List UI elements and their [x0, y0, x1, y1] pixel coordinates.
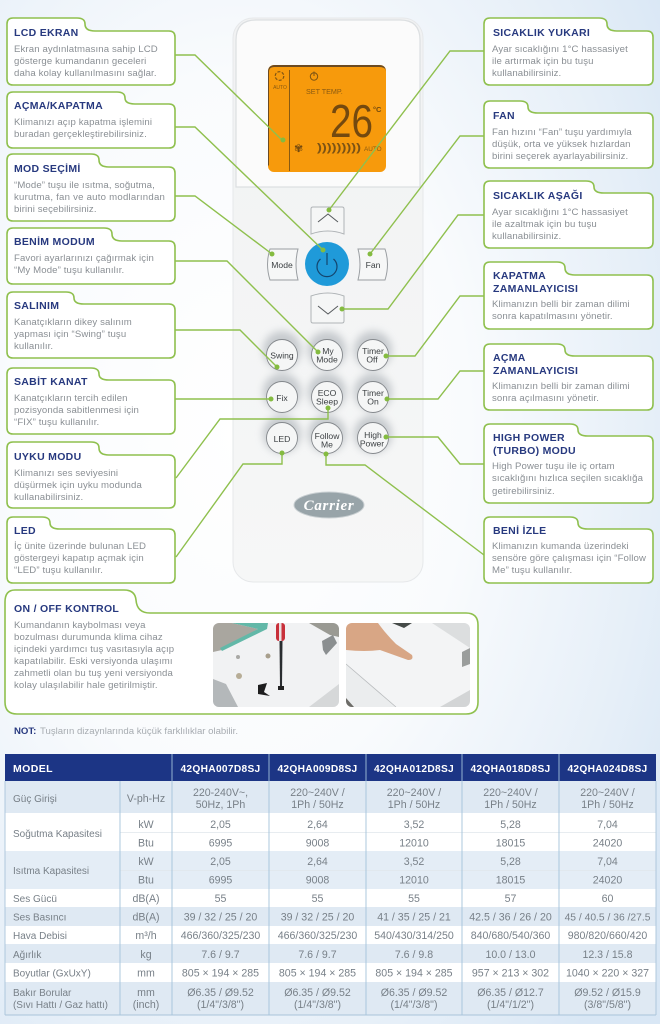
panel: Açma Zamanlayıcısı: Klimanızın belli bir zaman dilimi — [492, 381, 630, 392]
row: Ağırlık: 10.0 / 13.0 — [485, 949, 536, 961]
row: Ses Gücü: dB(A) — [132, 893, 160, 905]
panel: LCD Ekran: daha kolay kullanılmasını sağlar. — [14, 68, 157, 79]
row: Isıtma Kapasitesi: 12010 — [399, 874, 429, 886]
panel: Fan: düşük, orta ve yüksek hızlardan — [492, 139, 631, 150]
row: Bakır Borular — [13, 987, 641, 1011]
table header — [5, 754, 656, 781]
button: mode — [268, 249, 298, 280]
photo: screwdriver pressing the button — [213, 623, 339, 707]
row: Hava Debisi — [13, 930, 647, 942]
panel: High Power (Turbo) Modu: (TURBO) MODU — [493, 445, 576, 457]
row: Isıtma Kapasitesi: 18015 — [496, 874, 525, 886]
panel: High Power (Turbo) Modu: HIGH POWER — [493, 432, 565, 444]
row: Bakır Borular: (1/4"/3/8") — [294, 999, 341, 1011]
panel: Salınım: Kanatçıkların dikey salınım — [14, 317, 132, 328]
row: Güç Girişi: 1Ph / 50Hz — [291, 799, 344, 811]
panel: Sabit Kanat: “FIX” tuşu kullanılır. — [14, 417, 99, 428]
panel: Uyku Modu: Klimanızı ses seviyesini — [14, 468, 118, 479]
table header: MODEL — [13, 763, 53, 775]
row: Isıtma Kapasitesi: 9008 — [306, 874, 329, 886]
row: Soğutma Kapasitesi — [13, 819, 622, 850]
panel: Mod Seçimi: birini seçebilirsiniz. — [14, 204, 97, 215]
LCD display: ✾ — [294, 143, 303, 155]
row: Soğutma Kapasitesi: 18015 — [496, 838, 525, 850]
button: follow me: Follow — [315, 431, 340, 441]
button: eco sleep — [312, 382, 342, 412]
button shadows — [263, 331, 392, 453]
panel: High Power (Turbo) Modu: High Power tuşu ile iç ortam — [492, 461, 615, 472]
row: Isıtma Kapasitesi — [13, 856, 622, 886]
row: Ses Gücü: 57 — [505, 893, 516, 905]
row: Ses Basıncı: 41 / 35 / 25 / 21 — [377, 912, 451, 924]
row: Isıtma Kapasitesi: Btu — [138, 874, 154, 886]
panel: High Power (Turbo) Modu: sıcaklığını hızlıca seçilen sıcaklığa — [492, 473, 644, 484]
row: Ağırlık: 7.6 / 9.8 — [395, 949, 433, 961]
row: Ağırlık: 7.6 / 9.7 — [201, 949, 240, 961]
row: Bakır Borular: Ø6.35 / Ø9.52 — [284, 987, 351, 999]
panel: Fan: Fan hızını “Fan” tuşu yardımıyla — [492, 127, 632, 138]
button: my mode: Mode — [316, 354, 338, 364]
panel: High Power (Turbo) Modu — [484, 424, 653, 503]
panel: Mod Seçimi: MOD SEÇİMİ — [14, 162, 81, 175]
button: timer on: Timer — [362, 388, 384, 398]
panel: Beni İzle — [484, 517, 653, 583]
row: Güç Girişi: 220~240V / — [387, 787, 441, 799]
row: Soğutma Kapasitesi: Btu — [138, 838, 154, 850]
panel: Kapatma Zamanlayıcısı: sonra kapatılmasını yönetir. — [492, 311, 613, 322]
row: Bakır Borular: Bakır Borular — [13, 988, 72, 999]
table header: 42QHA009D8SJ — [277, 764, 358, 775]
panel: Benim Modum: BENİM MODUM — [14, 235, 95, 248]
panel: Beni İzle: Klimanızın kumanda üzerindeki — [492, 541, 629, 552]
panel: Salınım: SALINIM — [14, 300, 59, 312]
button: swing: Swing — [270, 350, 294, 360]
button: high power: Power — [360, 438, 384, 448]
panel: Fan: birini seçerek ayarlayabilirsiniz. — [492, 151, 628, 162]
row: Güç Girişi: Güç Girişi — [13, 794, 57, 805]
row: Boyutlar: 805 × 194 × 285 — [182, 968, 259, 980]
row: Ses Basıncı: 39 / 32 / 25 / 20 — [184, 912, 257, 924]
row: Soğutma Kapasitesi: kW — [138, 819, 154, 831]
button: led — [266, 422, 298, 454]
panel: Beni İzle: BENİ İZLE — [493, 524, 546, 537]
Carrier logo: Carrier — [304, 498, 354, 514]
button: fan: Fan — [366, 260, 381, 270]
panel: Sıcaklık Aşağı: Ayar sıcaklığını 1°C hassasiyet — [492, 207, 628, 218]
row: Ses Gücü: 55 — [408, 893, 420, 905]
panel: Uyku Modu — [7, 442, 175, 508]
panel: LED: “LED” tuşu kullanılır. — [14, 565, 103, 576]
row: Hava Debisi: 980/820/660/420 — [568, 930, 647, 942]
button: fix: Fix — [276, 393, 288, 403]
LCD display — [268, 65, 386, 172]
row: Ses Gücü: 55 — [215, 893, 226, 905]
button: down — [311, 293, 344, 323]
panel: On / Off Kontrol: Kumandanın kaybolması veya — [14, 620, 146, 631]
panel: Fan — [484, 101, 653, 168]
row: Bakır Borular: Ø9.52 / Ø15.9 — [574, 987, 641, 999]
panel: Sıcaklık Aşağı: kullanabilirsiniz. — [492, 231, 561, 242]
row: Güç Girişi: 220~240V / — [580, 787, 635, 799]
panel: LED: göstergeyi kapatıp açmak için — [14, 553, 144, 564]
leader lines — [175, 51, 484, 557]
button: up — [311, 207, 344, 234]
button: high power: High — [364, 430, 382, 440]
row: Ses Gücü: Ses Gücü — [13, 894, 57, 905]
LCD display: ))))))))) — [317, 142, 361, 154]
row: Ses Basıncı: 42.5 / 36 / 26 / 20 — [469, 912, 552, 924]
row: Güç Girişi: 1Ph / 50Hz — [581, 799, 634, 811]
row: Güç Girişi: 1Ph / 50Hz — [388, 799, 440, 811]
Carrier logo — [294, 492, 364, 518]
button: power — [305, 242, 349, 286]
row: Boyutlar: 1040 × 220 × 327 — [566, 968, 649, 980]
row: Ses Basıncı — [13, 912, 651, 924]
panel: On / Off Kontrol: kolay ulaşılabilir hale getirilmiştir. — [14, 680, 158, 691]
panel: Açma Zamanlayıcısı: AÇMA — [493, 352, 526, 364]
row: Ses Basıncı: 45 / 40.5 / 36 /27.5 — [565, 912, 651, 924]
row: Ağırlık — [13, 949, 633, 961]
note: NOT: — [14, 726, 36, 737]
table header: 42QHA018D8SJ — [470, 764, 551, 775]
row: Soğutma Kapasitesi: 2,05 — [210, 819, 231, 831]
panel: Sıcaklık Yukarı — [484, 18, 653, 85]
button: my mode — [312, 340, 342, 370]
row: Boyutlar: mm — [137, 968, 155, 980]
row: Bakır Borular: (inch) — [133, 999, 159, 1011]
row: Hava Debisi: 466/360/325/230 — [278, 930, 357, 942]
panel: LED — [7, 517, 175, 583]
row: Hava Debisi: m³/h — [135, 930, 157, 942]
row: Bakır Borular: (1/4"/3/8") — [197, 999, 244, 1011]
panel: Açma/Kapatma: Klimanızı açıp kapatma işlemini — [14, 117, 152, 128]
remote screen cover — [236, 20, 420, 187]
note: Tuşların dizaynlarında küçük farklılıklar olabilir. — [40, 726, 238, 737]
panel: Sabit Kanat: pozisyonda sabitlenmesi için — [14, 405, 139, 416]
panel: Kapatma Zamanlayıcısı: Klimanızın belli bir zaman dilimi — [492, 299, 630, 310]
panel: Açma/Kapatma: AÇMA/KAPATMA — [14, 100, 103, 112]
row: Boyutlar — [13, 968, 649, 980]
row: Güç Girişi: 1Ph / 50Hz — [484, 799, 537, 811]
panel: Kapatma Zamanlayıcısı: ZAMANLAYICISI — [493, 283, 578, 295]
row: Hava Debisi: 840/680/540/360 — [471, 930, 550, 942]
row: Ağırlık: 7.6 / 9.7 — [298, 949, 337, 961]
remote control — [233, 18, 423, 582]
row: Soğutma Kapasitesi: 2,64 — [307, 819, 328, 831]
row: Soğutma Kapasitesi: 9008 — [306, 838, 329, 850]
table header: 42QHA024D8SJ — [567, 764, 648, 775]
panel: On / Off Kontrol — [5, 590, 478, 714]
panel: Açma/Kapatma — [7, 92, 175, 148]
panel: On / Off Kontrol: bozulması durumunda klima cihaz — [14, 632, 163, 643]
LCD display: AUTO — [273, 85, 287, 91]
panel: LED: LED — [14, 525, 36, 537]
row: Soğutma Kapasitesi: Soğutma Kapasitesi — [13, 829, 102, 840]
panel: Beni İzle: Me” tuşu kullanılır. — [492, 565, 572, 576]
panel: On / Off Kontrol: zahmetli olan bu tuş yeni versiyonda — [14, 668, 174, 679]
panel: Benim Modum: Favori ayarlarınızı çağırmak için — [14, 253, 154, 264]
row: Ses Basıncı: 39 / 32 / 25 / 20 — [281, 912, 354, 924]
panel: Açma Zamanlayıcısı: sonra açılmasını yönetir. — [492, 393, 599, 404]
row: Boyutlar: Boyutlar (GxUxY) — [13, 968, 91, 980]
row: Soğutma Kapasitesi: 3,52 — [404, 819, 424, 831]
panel: Benim Modum — [7, 228, 175, 284]
row: Ses Basıncı: Ses Basıncı — [13, 912, 66, 924]
specifications table — [5, 754, 656, 1015]
row: Hava Debisi: 466/360/325/230 — [181, 930, 260, 942]
panel: Sabit Kanat: SABİT KANAT — [14, 375, 88, 388]
photo: finger pressing the button — [346, 623, 470, 707]
panel: Sıcaklık Yukarı: ile artırmak için bu tuşu — [492, 56, 594, 67]
table header: 42QHA012D8SJ — [374, 764, 454, 775]
panel: Mod Seçimi: “Mode” tuşu ile ısıtma, soğutma, — [14, 180, 155, 191]
panel: Sıcaklık Yukarı: SICAKLIK YUKARI — [493, 27, 590, 39]
row: Soğutma Kapasitesi: 6995 — [209, 838, 232, 850]
panel: Kapatma Zamanlayıcısı: KAPATMA — [493, 270, 546, 282]
row: Isıtma Kapasitesi: Isıtma Kapasitesi — [13, 866, 89, 877]
row: Bakır Borular: Ø6.35 / Ø9.52 — [187, 987, 254, 999]
panel: Açma Zamanlayıcısı — [484, 344, 653, 410]
panel: Salınım — [7, 292, 175, 358]
row: Isıtma Kapasitesi: 5,28 — [500, 856, 521, 868]
button: led: LED — [274, 434, 290, 444]
panel: LCD Ekran: gösterge kumandanın geceleri — [14, 56, 146, 67]
panel: Uyku Modu: düşürmek için uyku modunda — [14, 480, 142, 491]
panel: Fan: FAN — [493, 110, 515, 122]
panel: Sıcaklık Yukarı: kullanabilirsiniz. — [492, 68, 561, 79]
row: Hava Debisi: Hava Debisi — [13, 931, 67, 942]
button: mode: Mode — [271, 260, 293, 270]
row: Soğutma Kapasitesi: 24020 — [593, 838, 622, 850]
row: Ses Gücü: 60 — [602, 893, 613, 905]
row: Boyutlar: 805 × 194 × 285 — [375, 968, 453, 980]
button: high power — [358, 422, 388, 454]
row: Ses Basıncı: dB(A) — [132, 912, 160, 924]
row: Güç Girişi: V-ph-Hz — [127, 793, 165, 805]
button: follow me: Me — [321, 440, 333, 450]
row: Bakır Borular: Ø6.35 / Ø9.52 — [381, 987, 447, 999]
row: Ağırlık: kg — [140, 949, 152, 961]
row: Isıtma Kapasitesi: 6995 — [209, 874, 232, 886]
LCD display: SET TEMP. — [306, 87, 343, 96]
button: timer on — [358, 382, 388, 412]
row: Isıtma Kapasitesi: 2,05 — [210, 856, 231, 868]
row: Ses Gücü — [13, 893, 613, 905]
panel: Sıcaklık Aşağı: ile azaltmak için bu tuşu — [492, 219, 597, 230]
panel: Mod Seçimi — [7, 154, 175, 221]
button: timer off: Timer — [362, 346, 384, 356]
row: Ağırlık: Ağırlık — [13, 950, 42, 961]
LCD display: °C — [373, 105, 382, 114]
panel: Salınım: kullanılır. — [14, 341, 53, 352]
row: Boyutlar: 957 × 213 × 302 — [472, 968, 549, 980]
row: Boyutlar: 805 × 194 × 285 — [279, 968, 356, 980]
row: Bakır Borular: (3/8"/5/8") — [584, 999, 631, 1011]
row: Güç Girişi: 220~240V / — [290, 787, 345, 799]
panel: Sıcaklık Aşağı — [484, 181, 653, 248]
panel: Sabit Kanat: Kanatçıkların tercih edilen — [14, 393, 128, 404]
button: fix — [266, 382, 298, 412]
row: Ses Gücü: 55 — [312, 893, 323, 905]
panel: Beni İzle: sensöre göre çalışması için “Follow — [492, 553, 646, 564]
row: Isıtma Kapasitesi: 7,04 — [597, 856, 618, 868]
row: Isıtma Kapasitesi: kW — [138, 856, 154, 868]
button: timer off: Off — [366, 354, 378, 364]
row: Hava Debisi: 540/430/314/250 — [374, 930, 454, 942]
panel: Sıcaklık Aşağı: SICAKLIK AŞAĞI — [493, 189, 583, 202]
panel: Sabit Kanat — [7, 368, 175, 434]
button: eco sleep: ECO — [318, 388, 337, 398]
row: Isıtma Kapasitesi: 24020 — [593, 874, 622, 886]
table header: 42QHA007D8SJ — [180, 764, 261, 775]
row: Güç Girişi: 50Hz, 1Ph — [196, 799, 245, 811]
row: Güç Girişi: 220-240V~, — [193, 787, 248, 799]
LCD display: AUTO — [364, 146, 382, 153]
row: Isıtma Kapasitesi: 2,64 — [307, 856, 328, 868]
panel: High Power (Turbo) Modu: getirebilirsiniz. — [492, 486, 555, 497]
row: Güç Girişi — [13, 787, 635, 811]
button: swing — [266, 340, 298, 370]
button: timer on: On — [367, 396, 379, 406]
panel: Uyku Modu: kullanabilirsiniz. — [14, 492, 83, 503]
panel: Kapatma Zamanlayıcısı — [484, 262, 653, 329]
row: Bakır Borular: Ø6.35 / Ø12.7 — [477, 987, 544, 999]
panel: LCD Ekran — [7, 18, 175, 85]
panel: Açma Zamanlayıcısı: ZAMANLAYICISI — [493, 365, 578, 377]
row: Güç Girişi: 220~240V / — [483, 787, 538, 799]
panel: LCD Ekran: LCD EKRAN — [14, 27, 79, 39]
row: Bakır Borular: mm — [137, 987, 155, 999]
row: Isıtma Kapasitesi: 3,52 — [404, 856, 424, 868]
panel: On / Off Kontrol: ON / OFF KONTROL — [14, 603, 119, 615]
row: Soğutma Kapasitesi: 5,28 — [500, 819, 521, 831]
row: Bakır Borular: (Sıvı Hattı / Gaz hattı) — [13, 1000, 108, 1011]
button: fan — [358, 249, 388, 280]
row: Soğutma Kapasitesi: 12010 — [399, 838, 429, 850]
button: timer off — [358, 340, 388, 370]
panel: Uyku Modu: UYKU MODU — [14, 451, 81, 463]
row backgrounds — [5, 754, 656, 1015]
LCD display: 26 — [330, 95, 373, 147]
panel: LED: İç ünite üzerinde bulunan LED — [14, 541, 146, 552]
panel: Açma/Kapatma: buradan gerçekleştirebilirsiniz. — [14, 129, 147, 140]
row: Soğutma Kapasitesi: 7,04 — [597, 819, 618, 831]
panel: Salınım: yapması için “Swing” tuşu — [14, 329, 126, 340]
row: Bakır Borular: (1/4"/1/2") — [487, 999, 534, 1011]
panel: Benim Modum: “My Mode” tuşu kullanılır. — [14, 265, 124, 276]
row: Ağırlık: 12.3 / 15.8 — [582, 949, 633, 961]
button: eco sleep: Sleep — [316, 396, 338, 406]
panel: On / Off Kontrol: kapatılabilir. Eski versiyonda ulaşımı — [14, 656, 173, 667]
panel: Sıcaklık Yukarı: Ayar sıcaklığını 1°C hassasiyet — [492, 44, 628, 55]
panel: LCD Ekran: Ekran aydınlatmasına sahip LCD — [14, 44, 158, 55]
panel: On / Off Kontrol: içindeki yardımcı tuş vasıtasıyla açıp — [14, 644, 174, 655]
panel: Mod Seçimi: kurutma, fan ve auto modlarından — [14, 192, 165, 203]
row: Bakır Borular: (1/4"/3/8") — [391, 999, 437, 1011]
button: follow me — [312, 422, 342, 454]
button: my mode: My — [322, 346, 334, 356]
